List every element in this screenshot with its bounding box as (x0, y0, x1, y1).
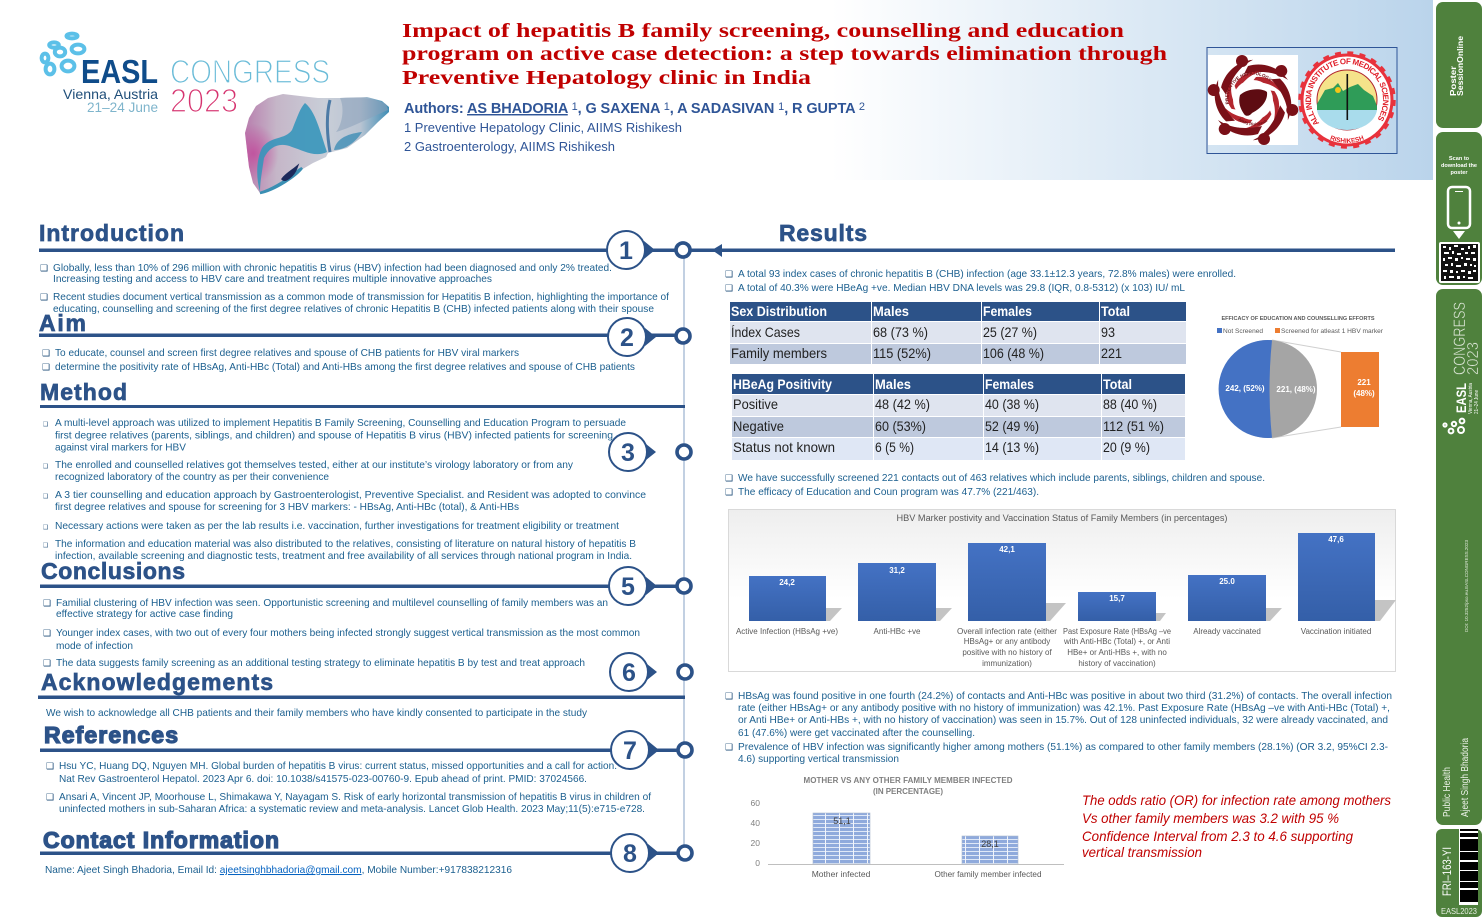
bar chart: mother vs other family member infected: Mother infected (812, 869, 871, 879)
section: references: Nat Rev Gastroenterol Hepatol. 2023 Apr 6. doi: 10.1038/s41575-023-00760-9. Epub ahead of print. PMID: 37024566. (59, 774, 587, 785)
logo: Preventive Hepatology clinic: PREVENTIVE HEPATOLOGY (1225, 72, 1272, 104)
bar chart: HBV marker positivity and vaccination status: 25.0 (1219, 577, 1235, 586)
callout: odds ratio: vertical transmission (1082, 844, 1202, 860)
table: sex distribution: Family members (731, 345, 827, 361)
section: introduction: Globally, less than 10% of 296 million with chronic hepatitis B virus (HBV) infection had been diagnosed and only 2% treated. (53, 263, 612, 274)
section: references: Ansari A, Vincent JP, Moorhouse L, Shimakawa Y, Nayagam S. Risk of early horizontal transmission of hepatitis B virus in children of (59, 792, 651, 803)
section: references: ❑ (46, 762, 54, 772)
icon: arrow down (1453, 231, 1465, 239)
panel: scan to download (1436, 132, 1482, 285)
results discussion text: ❑ (725, 743, 733, 753)
logo: EASL Congress 2023: EASL (81, 53, 158, 90)
timeline connector (683, 257, 685, 860)
logo: EASL Congress 2023: 21–24 June (87, 99, 158, 115)
panel: poster id and barcode: EASL2023 (1441, 906, 1477, 916)
title (402, 20, 1168, 89)
authors: 1 Preventive Hepatology Clinic, AIIMS Rishikesh (404, 120, 682, 135)
results discussion text: HBsAg was found positive in one fourth (24.2%) of contacts and Anti-HBc was positive in about two third (31.2%) of contacts. The overall infection (738, 691, 1392, 702)
section: results heading (676, 220, 1395, 257)
marker 2 (608, 318, 690, 356)
table: HBeAg positivity: HBeAg Positivity (733, 376, 832, 392)
results intro text: ❑ (725, 270, 733, 280)
panel: congress and track: CONGRESS (1450, 302, 1469, 375)
panel: scan to download: Scan to (1449, 156, 1470, 162)
logo panel: institutions (1206, 47, 1398, 154)
bar chart: HBV marker positivity and vaccination status: 42,1 (999, 545, 1015, 554)
section: method: ❑ (43, 542, 48, 549)
bar chart: HBV marker positivity and vaccination status (728, 510, 1396, 672)
authors: 1 (572, 101, 578, 113)
bar chart: mother vs other family member infected: (IN PERCENTAGE) (873, 787, 943, 796)
table: sex distribution: 221 (1101, 345, 1122, 361)
marker 1: 1 (619, 237, 633, 265)
results discussion text: or Anti HBe+ or Anti-HBs +, with no history of vaccination) was seen in 15.7%. Out of 128 uninfected individuals, 32 were already vaccinated, and (738, 715, 1388, 726)
table: HBeAg positivity: 14 (13 %) (985, 439, 1039, 455)
bar chart: HBV marker positivity and vaccination status: Vaccination initiated (1301, 627, 1371, 636)
bar chart: HBV marker positivity and vaccination status: Past Exposure Rate (HBsAg –ve (1063, 627, 1172, 636)
sidebar: poster session panels (1436, 2, 1482, 917)
table: HBeAg positivity (732, 374, 1185, 460)
section: introduction: ❑ (40, 293, 48, 303)
panel: poster id and barcode: FRI–163-YI (1440, 847, 1454, 896)
bar chart: mother vs other family member infected: 0 (755, 858, 760, 868)
bar chart: HBV marker positivity and vaccination status: Anti-HBc +ve (874, 627, 921, 636)
arrow: results pointer (712, 244, 722, 257)
panel: scan to download: poster (1450, 170, 1468, 176)
bar chart: mother vs other family member infected (751, 776, 1064, 879)
section: introduction (39, 220, 689, 315)
table: HBeAg positivity: 20 (9 %) (1103, 439, 1150, 455)
table: HBeAg positivity: 52 (49 %) (985, 418, 1039, 434)
bar chart: HBV marker positivity and vaccination status: Overall infection rate (either (957, 627, 1057, 636)
results summary text: ❑ (725, 474, 733, 484)
section: method: The information and education material was also distributed to the relatives, consisting of literature on natural history of hepatitis B (55, 539, 636, 550)
pie chart: efficacy of education and counselling: (48%) (1353, 389, 1375, 398)
results discussion text (725, 691, 1392, 765)
callout: odds ratio: The odds ratio (OR) for infection rate among mothers (1082, 792, 1391, 808)
logo: EASL Congress 2023 (42, 34, 330, 119)
marker 5 (609, 567, 691, 605)
section: method: against viral markers for HBV (55, 442, 186, 454)
marker 3: 3 (621, 439, 635, 467)
logo: AIIMS Rishikesh: RISHIKESH (1330, 135, 1364, 143)
marker 5: 5 (621, 573, 635, 601)
bar chart: HBV marker positivity and vaccination status: positive with no history of (962, 648, 1052, 657)
section: conclusions: The data suggests family screening as an additional testing strategy to eliminate hepatitis B by test and treat approach (56, 658, 585, 669)
results summary text (725, 473, 1265, 498)
results summary text: The efficacy of Education and Coun program was 47.7% (221/463). (738, 487, 1039, 498)
bar chart: mother vs other family member infected: 20 (751, 838, 760, 848)
header banner (0, 0, 1433, 180)
section: acknowledgements: Acknowledgements (41, 669, 273, 695)
section: acknowledgements (38, 669, 685, 719)
section: method: first degree relatives and spouse for screening for 3 HBV markers: - HBsAg, Anti-HBc (total), & Anti-HBs (55, 502, 519, 513)
callout: odds ratio: Confidence Interval from 2.3 to 4.6 supporting (1082, 828, 1353, 844)
section: method: A multi-level approach was utilized to implement Hepatitis B Family Screening, Counselling and Education Program to persuade (55, 418, 626, 429)
table: HBeAg positivity: 48 (42 %) (875, 396, 930, 412)
marker 3 (609, 433, 691, 471)
title: program on active case detection: a step towards elimination through (402, 43, 1168, 65)
results intro text: ❑ (725, 284, 733, 294)
bar chart: HBV marker positivity and vaccination status: 47,6 (1328, 535, 1344, 544)
table: HBeAg positivity: Total (1103, 376, 1132, 392)
timeline markers (607, 231, 692, 872)
bar chart: HBV marker positivity and vaccination status: HBsAg+ or any antibody (964, 637, 1050, 646)
legend: Not Screened (1223, 329, 1263, 335)
bar chart: mother vs other family member infected: 28,1 (981, 839, 999, 849)
bar chart: HBV marker positivity and vaccination status: 31,2 (889, 566, 905, 575)
section: conclusions: ❑ (43, 629, 51, 639)
section: conclusions: Younger index cases, with two out of every four mothers being infected strongly suggest vertical transmission as the most common (56, 628, 640, 639)
table: sex distribution: 93 (1101, 324, 1115, 340)
section: references: uninfected mothers in sub-Saharan Africa: a systematic review and meta-analysis. Lancet Glob Health. 2023 May;11(5):e715-e728. (59, 804, 645, 815)
panel: congress and track: 2023 (1465, 342, 1482, 375)
table: HBeAg positivity: Status not known (733, 439, 835, 455)
results summary text: We have successfully screened 221 contacts out of 463 relatives which include parents, siblings, children and spouse. (738, 473, 1265, 484)
logo: Preventive Hepatology clinic: AIIMS Rishikesh (1238, 118, 1268, 126)
table: sex distribution: 106 (48 %) (983, 345, 1044, 361)
section: introduction: ❑ (40, 264, 48, 274)
authors (404, 101, 865, 154)
callout: odds ratio (1082, 792, 1391, 860)
results intro text: A total of 40.3% were HBeAg +ve. Median HBV DNA levels was 29.8 (IQR, 0.8-5312) (x 103) IU/ mL (738, 283, 1185, 294)
icon: phone (1448, 187, 1470, 228)
section: method: recognized laboratory of the country as per their convenience (55, 472, 329, 483)
marker 6 (610, 653, 692, 691)
logo: EASL Congress 2023: Vienna, Austria (63, 86, 158, 102)
panel: congress and track (1436, 289, 1482, 825)
section: conclusions: ❑ (43, 659, 51, 669)
marker 2: 2 (620, 324, 634, 352)
section: introduction: educating, counselling and screening of the first degree relatives of chronic Hepatitis B (CHB) infected patients along with their spouse (53, 304, 654, 315)
section: aim: Aim (39, 310, 86, 336)
section: method: Method (40, 379, 127, 405)
table: HBeAg positivity: Positive (733, 396, 778, 412)
table: sex distribution: Índex Cases (731, 324, 800, 340)
table: sex distribution: 68 (73 %) (873, 324, 928, 340)
section: acknowledgements: We wish to acknowledge all CHB patients and their family members who have kindly consented to participate in the study (46, 708, 588, 719)
section: method: Necessary actions were taken as per the lab results i.e. vaccination, further investigations for treatment eligibility or treatment (55, 521, 619, 532)
panel: poster id and barcode (1436, 829, 1482, 917)
section: conclusions: Familial clustering of HBV infection was seen. Opportunistic screening and multilevel counselling of family members was an (56, 598, 608, 609)
section: method: first degree relatives (parents, siblings, and children) and spouse of Hepatitis B virus (HBV) infected patients for screening (55, 430, 613, 442)
panel: scan to download: download the (1441, 163, 1477, 169)
panel: congress and track: EASL (1453, 383, 1469, 413)
pie chart: efficacy of education and counselling: EFFICACY OF EDUCATION AND COUNSELLING EFFORTS (1222, 316, 1375, 322)
results intro text: A total 93 index cases of chronic hepatitis B (CHB) infection (age 33.1±12.3 years, 72.8% males) were enrolled. (738, 269, 1236, 280)
logo: EASL Congress 2023: 2023 (170, 82, 238, 119)
logo: EASL Congress 2023: CONGRESS (170, 53, 330, 90)
section: conclusions: ❑ (43, 599, 51, 609)
section: method: ❑ (43, 421, 48, 428)
section: results heading: Results (779, 220, 867, 246)
panel: Poster Session Online (1436, 2, 1482, 128)
section: references (40, 722, 690, 815)
section: aim: To educate, counsel and screen first degree relatives and spouse of CHB patients for HBV viral markers (55, 348, 519, 359)
authors: , R GUPTA (784, 101, 859, 117)
section: conclusions (40, 558, 690, 669)
table: HBeAg positivity: 6 (5 %) (875, 439, 914, 455)
panel: congress and track: Vienna, Austria (1468, 383, 1474, 414)
results intro text (725, 269, 1236, 294)
table: sex distribution: Sex Distribution (731, 303, 827, 319)
section: references: References (44, 722, 178, 748)
authors: 2 (859, 101, 865, 113)
table: HBeAg positivity: 112 (51 %) (1103, 418, 1164, 434)
section: contact information: Contact Information (43, 827, 279, 853)
panel: congress and track: Public Health (1441, 767, 1453, 817)
bar chart: HBV marker positivity and vaccination status: history of vaccination) (1078, 659, 1156, 668)
table: HBeAg positivity: Females (985, 376, 1034, 392)
bar chart: mother vs other family member infected: 51,1 (833, 816, 851, 826)
results discussion text: Prevalence of HBV infection was significantly higher among mothers (51.1%) as compared to other family members (28.1%) (OR 3.2, 95%CI 2.3- (738, 742, 1388, 753)
section: introduction: Increasing testing and access to HBV care and treatment requires multiple innovative approaches (53, 274, 492, 285)
title: Preventive Hepatology clinic in India (402, 67, 811, 89)
section: introduction: Introduction (39, 220, 184, 246)
bar chart: HBV marker positivity and vaccination status: immunization) (982, 659, 1032, 668)
table: HBeAg positivity: 40 (38 %) (985, 396, 1039, 412)
icon: hexagon cells (42, 34, 84, 74)
section: method: A 3 tier counselling and education approach by Gastroenterologist, Preventive Specialist. and Resident was adopted to convince (55, 490, 646, 501)
authors: , A SADASIVAN (670, 101, 778, 117)
results discussion text: 4.6) supporting vertical transmission (738, 754, 899, 765)
section: conclusions: effective strategy for active case finding (56, 609, 233, 620)
marker 7: 7 (623, 737, 637, 765)
section: aim: determine the positivity rate of HBsAg, Anti-HBc (Total) and Anti-HBs among the first degree relatives and spouse of CHB patients (55, 362, 635, 373)
QR code (1439, 242, 1480, 283)
logo: Preventive Hepatology clinic (1208, 55, 1298, 145)
authors: Authors: AS BHADORIA (404, 101, 568, 117)
logo: AIIMS Rishikesh (1298, 51, 1396, 149)
bar chart: HBV marker positivity and vaccination status: 24,2 (779, 578, 795, 587)
section: conclusions: Conclusions (41, 558, 185, 584)
barcode (1459, 829, 1478, 905)
table: HBeAg positivity: Males (875, 376, 911, 392)
callout: odds ratio: Vs other family members was 3.2 with 95 % (1082, 810, 1339, 826)
results discussion text: ❑ (725, 692, 733, 702)
authors: 1 (664, 101, 670, 113)
authors: 2 Gastroenterology, AIIMS Rishikesh (404, 139, 615, 154)
bar chart: HBV marker positivity and vaccination status: Already vaccinated (1193, 627, 1261, 636)
bar chart: HBV marker positivity and vaccination status: Active Infection (HBsAg +ve) (736, 627, 838, 636)
section: references: Hsu YC, Huang DQ, Nguyen MH. Global burden of hepatitis B virus: current status, missed opportunities and a call for action. (59, 761, 617, 772)
bar chart: mother vs other family member infected: Other family member infected (934, 869, 1042, 879)
table: sex distribution: Males (873, 303, 909, 319)
section: conclusions: mode of infection (56, 641, 133, 652)
table: sex distribution: 115 (52%) (873, 345, 931, 361)
logo: AIIMS Rishikesh: ALL INDIA INSTITUTE OF MEDICAL SCIENCES (1306, 58, 1389, 125)
marker 6: 6 (622, 659, 636, 687)
marker 1 (607, 231, 690, 269)
section: contact information: Name: Ajeet Singh Bhadoria, Email Id: ajeetsinghbhadoria@gmail.com, Mobile Number:+917838212316 (45, 865, 512, 876)
section: method: ❑ (43, 463, 48, 470)
section: method (40, 379, 685, 562)
icon: hexagons (1443, 419, 1464, 433)
marker 8 (611, 834, 692, 872)
legend (1217, 328, 1383, 335)
section: method: ❑ (43, 493, 48, 500)
table: sex distribution (730, 302, 1186, 364)
pie chart: efficacy of education and counselling (1217, 316, 1383, 438)
section: aim (39, 310, 689, 373)
authors: , G SAXENA (578, 101, 664, 117)
panel: congress and track: 21–24 June (1474, 390, 1480, 414)
title: Impact of hepatitis B family screening, counselling and education (402, 20, 1125, 42)
table: HBeAg positivity: Negative (733, 418, 784, 434)
section: aim: ❑ (42, 363, 50, 373)
section: aim: ❑ (42, 349, 50, 359)
bar chart: HBV marker positivity and vaccination status: HBV Marker postivity and Vaccination Status of Family Members (in percentages) (896, 513, 1228, 523)
table: HBeAg positivity: 60 (53%) (875, 418, 926, 434)
table: sex distribution: Total (1101, 303, 1130, 319)
bar chart: mother vs other family member infected: 40 (751, 818, 760, 828)
bar chart: mother vs other family member infected: MOTHER VS ANY OTHER FAMILY MEMBER INFECTED (804, 776, 1013, 785)
icon: liver illustration (245, 94, 389, 193)
authors: 1 (778, 101, 784, 113)
section: introduction: Recent studies document vertical transmission as a common mode of transmission for Hepatitis B infection, highlighting the importance of (53, 292, 669, 303)
section: method: ❑ (43, 524, 48, 531)
pie chart: efficacy of education and counselling: 242, (52%) (1225, 384, 1265, 393)
results discussion text: rate (either HBsAg+ or any antibody positive with no history of immunization) was 42.1%. Past Exposure Rate (HBsAg –ve with Anti-HBc (Total) +, (738, 703, 1390, 714)
pie chart: efficacy of education and counselling: 221, (48%) (1276, 385, 1316, 394)
bar chart: HBV marker positivity and vaccination status: 15,7 (1109, 594, 1125, 603)
table: sex distribution: 25 (27 %) (983, 324, 1037, 340)
table: sex distribution: Females (983, 303, 1032, 319)
bar chart: HBV marker positivity and vaccination status: HBe+ or Anti-HBs +, with no (1067, 648, 1167, 657)
panel: Poster Session Online: Poster (1449, 66, 1458, 96)
section: method: The enrolled and counselled relatives got themselves tested, either at our institute’s virology laboratory or from any (55, 460, 574, 471)
section: contact information (40, 827, 690, 876)
pie chart: efficacy of education and counselling: 221 (1357, 378, 1371, 387)
marker 8: 8 (623, 840, 637, 868)
panel: Poster Session Online: SessionOnline (1456, 35, 1465, 96)
results discussion text: 61 (47.6%) were get vaccinated after the counselling. (738, 728, 975, 739)
legend: Screened for atleast 1 HBV marker (1281, 329, 1383, 335)
liver ligament band (257, 103, 327, 192)
section: references: ❑ (46, 793, 54, 803)
panel: congress and track: DOI: 10.3252/pso.eu.EASLCONGRESS.2023 (1464, 540, 1470, 632)
bar chart: HBV marker positivity and vaccination status: with Anti-HBc (Total) +, or Anti (1063, 637, 1170, 646)
section: method: infection, available screening and diagnostic tests, treatment and free availability of all services through national program in India. (55, 551, 632, 562)
marker 7 (611, 731, 692, 769)
table: HBeAg positivity: 88 (40 %) (1103, 396, 1157, 412)
bar chart: mother vs other family member infected: 60 (751, 798, 760, 808)
results summary text: ❑ (725, 488, 733, 498)
panel: congress and track: Ajeet Singh Bhadoria (1459, 738, 1471, 817)
